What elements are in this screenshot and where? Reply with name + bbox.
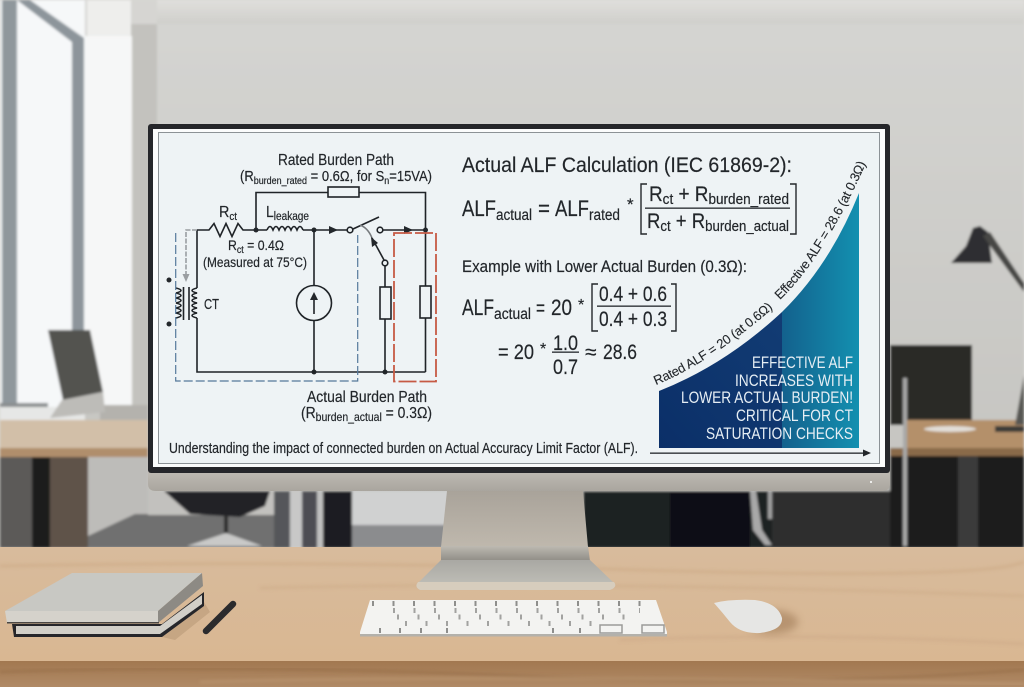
burden path labels: n [384, 176, 389, 187]
desk surface [0, 547, 1024, 687]
formula: general ALF: ALF [462, 196, 496, 221]
CT transformer [166, 230, 426, 372]
heading: calculation: Actual ALF Calculation (IEC 61869-2): [462, 154, 792, 177]
formula: general ALF: R [647, 210, 662, 233]
formula: general ALF: R [649, 183, 664, 206]
switch [347, 217, 388, 266]
burden path labels: burden_actual [316, 410, 382, 424]
formula: worked example: = [536, 297, 545, 320]
formula: general ALF: ct [660, 218, 671, 235]
formula: worked example: 28.6 [603, 341, 637, 364]
formula: general ALF: burden_rated [708, 191, 789, 208]
monitor chin [148, 470, 890, 491]
effective region [782, 193, 859, 448]
chart: effective ALF curve area [653, 162, 868, 448]
formula: general ALF: * [627, 195, 634, 214]
keyboard [360, 600, 667, 636]
burden path labels: Actual Burden Path [307, 389, 427, 406]
mouse [714, 600, 798, 634]
red dashed actual burden box [394, 233, 436, 382]
rated ALF label on curve: Rated ALF = 20 (at 0.6Ω) [653, 303, 773, 385]
formula: worked example: 0.4 + 0.3 [599, 308, 667, 331]
formula: general ALF: ct [663, 191, 674, 208]
burden path labels [203, 152, 432, 424]
burden path labels: burden_rated [254, 176, 307, 187]
formula: general ALF: actual [496, 207, 532, 224]
formula: worked example: actual [494, 306, 531, 323]
burden path labels: ct [237, 245, 244, 256]
callout text: LOWER ACTUAL BURDEN! [681, 389, 853, 407]
circuit diagram [166, 152, 436, 424]
formula: worked example: ALF [462, 295, 494, 320]
burden path labels: R [228, 237, 238, 253]
blue dashed loop [176, 233, 358, 381]
pen [206, 604, 233, 631]
footer caption: Understanding the impact of connected burden on Actual Accuracy Limit Factor (ALF). [169, 441, 638, 457]
formula: worked example: 1.0 [553, 332, 578, 355]
burden path labels: ct [229, 211, 237, 223]
direction arrows [254, 226, 428, 374]
callout text: CRITICAL FOR CT [736, 407, 853, 425]
power led [870, 481, 872, 483]
formula: worked example: ≈ [585, 341, 597, 364]
rated burden rail with resistor [256, 187, 426, 372]
formula: worked example [462, 283, 676, 379]
background: blurred office room [0, 0, 1024, 548]
burden path labels: Rated Burden Path [278, 152, 394, 169]
main line with Rct and Lleakage [197, 224, 426, 236]
burden path labels: (R [240, 169, 255, 185]
grey current arrow [182, 230, 197, 282]
burden path labels: (R [301, 405, 318, 422]
burden path labels: =15VA) [389, 169, 432, 185]
formula: worked example: = 20 [498, 341, 534, 364]
formula: general ALF: ALF [555, 196, 589, 221]
callout text: INCREASES WITH [735, 372, 853, 390]
burden path labels: R [219, 204, 231, 221]
burden path labels: L [266, 204, 275, 221]
burden path labels: = 0.4Ω [244, 237, 284, 253]
monitor stand [416, 491, 615, 590]
current source [296, 230, 332, 372]
callout text: SATURATION CHECKS [706, 425, 853, 443]
rated region [659, 312, 782, 448]
formula: general ALF: + R [671, 210, 705, 233]
burden path labels: leakage [274, 211, 309, 223]
burden path labels: = 0.6Ω, for S [307, 169, 384, 185]
formula: worked example: 0.4 + 0.6 [599, 283, 667, 306]
burden path labels: = 0.3Ω) [382, 405, 432, 422]
burden path labels: CT [204, 296, 219, 313]
callout text: EFFECTIVE ALF [752, 354, 853, 372]
burden path labels: (Measured at 75°C) [203, 254, 307, 270]
actual burden branch resistors [380, 266, 431, 372]
monitor bezel and screen [148, 124, 890, 473]
formula: general ALF: + R [673, 183, 708, 206]
formula: general ALF: = [538, 196, 550, 221]
example heading: Example with Lower Actual Burden (0.3Ω): [462, 258, 747, 276]
formula: worked example: * [578, 297, 584, 314]
books [5, 573, 210, 640]
formula: worked example: * [540, 341, 546, 358]
formula: general ALF: rated [589, 207, 620, 224]
formula: worked example: 0.7 [553, 356, 578, 379]
callout text [681, 354, 853, 443]
formula: worked example: 20 [551, 295, 572, 320]
formula: general ALF: burden_actual [705, 218, 789, 235]
axis arrow [650, 450, 871, 456]
formula: general ALF [462, 183, 796, 235]
effective ALF label on curve: Effective ALF = 28.6 (at 0.3Ω) [774, 162, 868, 300]
